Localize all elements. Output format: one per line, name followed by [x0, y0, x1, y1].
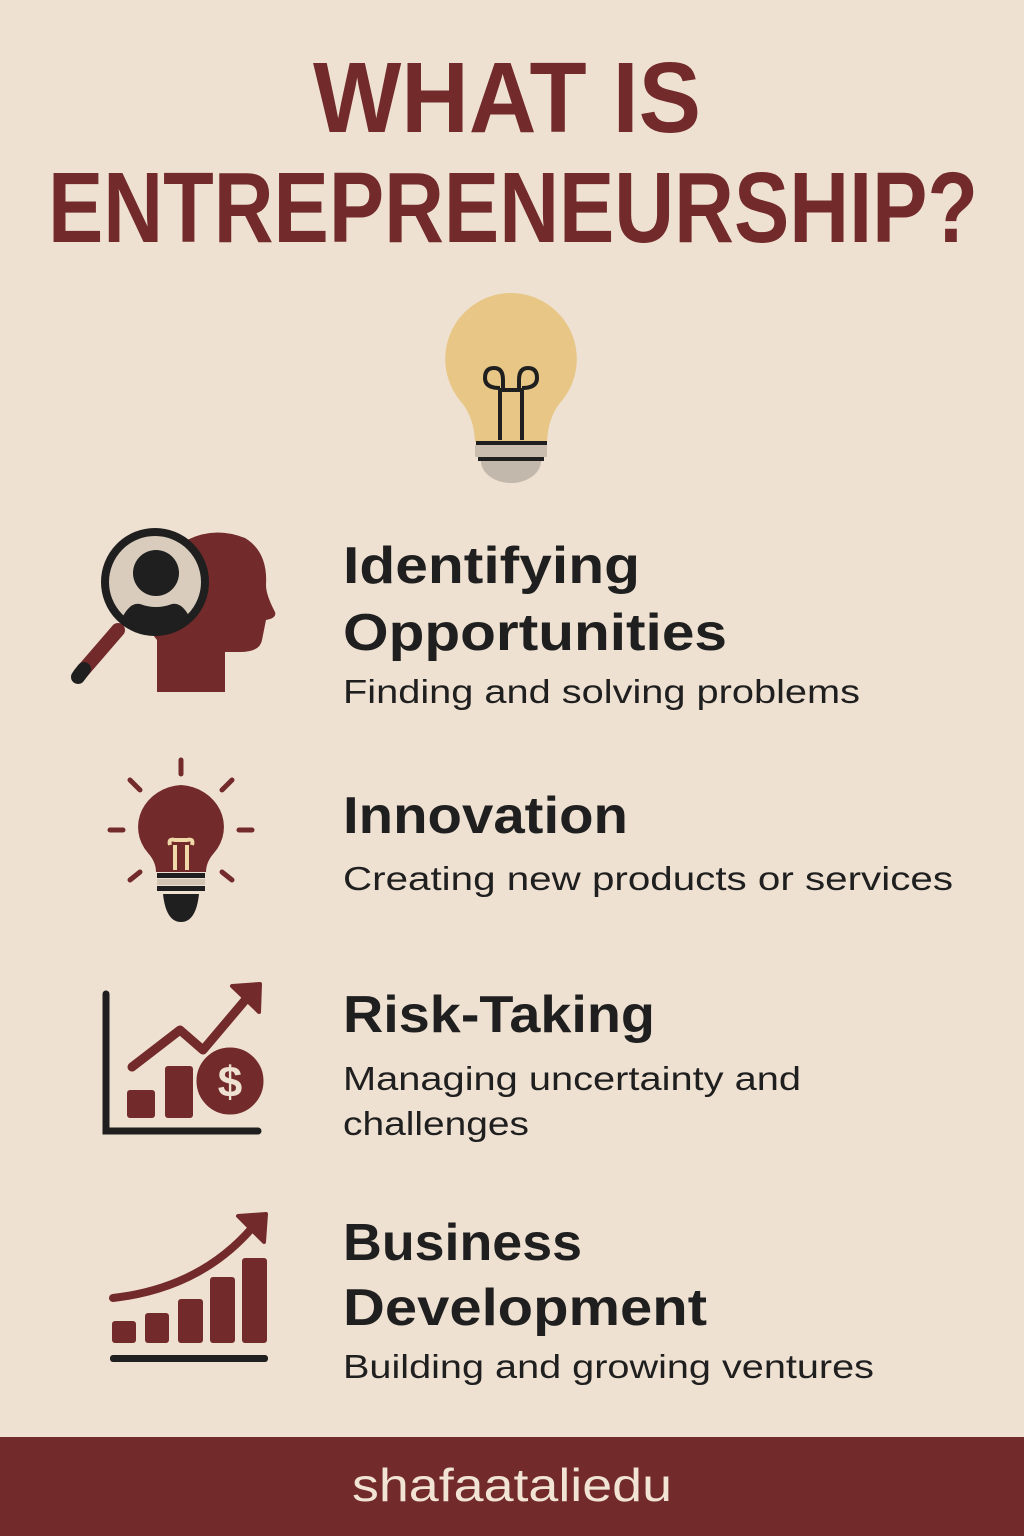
text: business development: Business [343, 1214, 582, 1272]
icon: big light bulb [445, 293, 577, 483]
text: identifying opportunities: Finding and solving problems [343, 673, 860, 710]
icon: risk chart: $ [218, 1058, 242, 1107]
icon: head with magnifier [78, 532, 275, 692]
text: business development: Development [343, 1279, 707, 1337]
text: risk-taking: challenges [343, 1105, 529, 1142]
title [48, 42, 978, 264]
footer band: shafaataliedu [352, 1459, 672, 1511]
icon: risk chart [106, 984, 265, 1131]
text: business development [343, 1214, 874, 1385]
text: risk-taking: Managing uncertainty and [343, 1060, 801, 1097]
icon: business growth chart [110, 1214, 268, 1362]
title: WHAT IS [313, 42, 701, 154]
icon: innovation bulb [110, 760, 252, 922]
text: identifying opportunities: Identifying [343, 537, 640, 595]
text: innovation [343, 787, 953, 897]
text: risk-taking: Risk-Taking [343, 986, 655, 1044]
text: innovation: Innovation [343, 787, 628, 845]
text: identifying opportunities: Opportunities [343, 604, 727, 662]
text: risk-taking [343, 986, 801, 1142]
footer band [0, 1437, 1024, 1536]
text: identifying opportunities [343, 537, 860, 710]
text: business development: Building and growing ventures [343, 1348, 874, 1385]
text: innovation: Creating new products or services [343, 860, 953, 897]
